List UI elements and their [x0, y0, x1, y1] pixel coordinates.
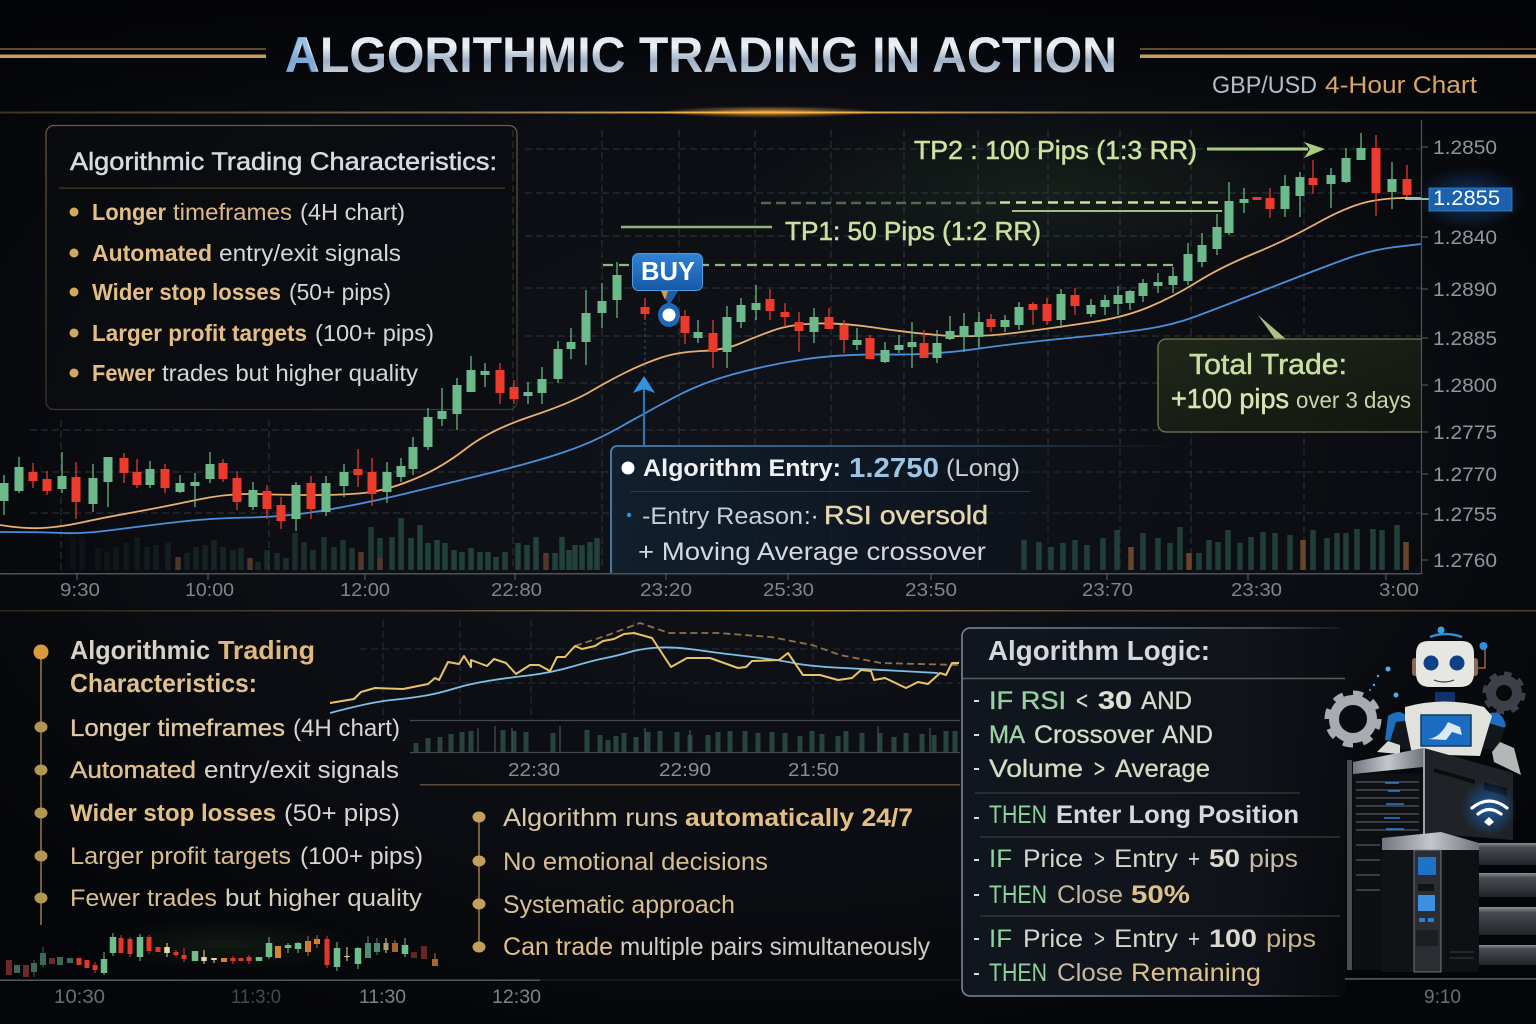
entry reason — [627, 500, 988, 566]
mini chart time labels: 21:50 — [788, 760, 839, 780]
logic: entry conditions: Volume — [989, 755, 1083, 783]
front server — [1382, 832, 1479, 972]
bullet: longer timeframes: timeframes — [173, 199, 292, 225]
list item: systematic: Systematic approach — [503, 891, 735, 919]
logic: second target: Price — [1023, 925, 1083, 953]
logic: second target: Remaining — [1131, 959, 1261, 987]
price axis: 1.2770 — [1433, 465, 1497, 486]
timeline item: larger targets — [34, 843, 423, 870]
bullet: longer timeframes — [70, 199, 405, 225]
logic: first target: > — [1094, 845, 1105, 873]
list item: runs automatically: automatically 24/7 — [685, 804, 913, 832]
timeline item: wider stops — [34, 800, 400, 827]
BUY marker: BUY — [641, 256, 695, 286]
timeline item: wider stops: Wider stop losses — [70, 800, 276, 827]
bullet: larger targets: (100+ pips) — [315, 320, 434, 346]
bottom axis: 9:10 — [1424, 987, 1461, 1008]
callout: algorithm entry box — [611, 446, 1180, 573]
timeline item: automated: entry/exit signals — [204, 757, 399, 784]
section divider — [0, 610, 1536, 612]
list item: multiple pairs — [472, 933, 930, 961]
mini chart time labels: 22:90 — [659, 760, 711, 780]
wifi icon — [1461, 780, 1517, 836]
logic: enter position: THEN — [989, 801, 1047, 829]
time axis: 22:80 — [491, 580, 542, 600]
moving average: blue — [0, 244, 1421, 533]
mini chart: dashed tan line — [575, 623, 959, 665]
bullet: larger targets: Larger profit targets — [92, 320, 307, 346]
logic: entry conditions: Crossover — [1034, 721, 1154, 749]
time axis: 3:00 — [1379, 580, 1419, 600]
logic: entry conditions: < — [1076, 687, 1088, 715]
header divider — [0, 106, 1536, 118]
time axis — [0, 573, 1421, 600]
timeline item: longer timeframes: Longer timeframes — [70, 715, 285, 742]
callout: total trade: Total Trade: — [1189, 349, 1347, 381]
timeline heading: Algorithmic — [70, 635, 210, 665]
mini chart: volume — [410, 720, 960, 752]
mini chart time labels: 22:30 — [508, 760, 560, 780]
current price tag: 1.2855 — [1433, 187, 1500, 210]
bullet: fewer trades: Fewer — [92, 360, 155, 386]
logic: entry conditions: 30 — [1098, 687, 1132, 715]
robot arms and shoulders — [1377, 712, 1521, 775]
bottom axis: 11:30 — [359, 987, 406, 1008]
price axis: 1.2890 — [1433, 280, 1497, 301]
time axis: 25:30 — [763, 580, 814, 600]
entry reason: RSI oversold — [824, 500, 988, 530]
timeline item: larger targets: (100+ pips) — [300, 843, 423, 870]
logic: first target: Close — [1057, 881, 1123, 909]
current price tag — [1405, 166, 1525, 230]
bottom axis — [0, 980, 1461, 1008]
TP1 label: TP1: 50 Pips (1:2 RR) — [785, 216, 1041, 246]
logic heading: Algorithm Logic: — [988, 635, 1210, 666]
timeline item: wider stops: (50+ pips) — [284, 800, 400, 827]
time axis: 10:00 — [185, 580, 234, 600]
subtitle: GBP/USD — [1212, 72, 1317, 99]
time axis: 23:70 — [1082, 580, 1133, 600]
entry price line: (Long) — [946, 455, 1020, 482]
bottom axis: 11:3:0 — [231, 987, 281, 1008]
callout: total trade — [1158, 315, 1421, 432]
callout: total trade: +100 pips — [1171, 383, 1289, 414]
time axis: 12:00 — [340, 580, 390, 600]
moving average: orange — [0, 198, 1421, 528]
logic: second target: + — [1188, 925, 1200, 953]
timeline item: fewer trades: but higher quality — [225, 885, 422, 912]
logic: entry conditions: Average — [1115, 755, 1210, 783]
price axis: 1.2800 — [1433, 376, 1497, 397]
icon: sparkles — [1369, 666, 1398, 698]
logic: first target — [989, 845, 1298, 909]
bullet: longer timeframes: Longer — [92, 199, 166, 225]
logic: second target: IF — [989, 925, 1012, 953]
entry reason: + Moving Average crossover — [638, 538, 986, 566]
list item: multiple pairs: Can trade — [503, 933, 613, 961]
bottom-middle timeline list — [472, 804, 930, 961]
price axis: 1.2755 — [1433, 505, 1497, 526]
logic: entry conditions: IF RSI — [989, 687, 1066, 715]
bullet: larger targets — [70, 320, 434, 346]
price axis: 1.2840 — [1433, 228, 1497, 249]
logic: enter position: Enter Long Position — [1056, 801, 1299, 829]
timeline heading: Characteristics: — [70, 668, 257, 698]
logic: first target: THEN — [989, 881, 1047, 909]
subtitle — [1212, 72, 1477, 99]
list item: runs automatically: Algorithm runs — [503, 804, 678, 832]
bottom axis: 12:30 — [492, 987, 541, 1008]
logic: entry conditions — [989, 687, 1213, 783]
base line — [1345, 978, 1536, 980]
TP2 label with arrow: TP2 : 100 Pips (1:3 RR) — [914, 135, 1197, 165]
main chart grid — [30, 130, 1421, 570]
list item: runs automatically — [472, 804, 913, 832]
panel heading: Algorithmic Trading Characteristics: — [70, 148, 497, 176]
timeline heading: Trading — [218, 635, 315, 665]
title: A — [285, 27, 318, 83]
logic: first target: Entry — [1114, 845, 1179, 873]
time axis: 9:30 — [60, 580, 100, 600]
timeline item: larger targets: Larger profit targets — [70, 843, 291, 870]
entry arrow — [633, 322, 655, 446]
logic: second target: 100 — [1209, 925, 1257, 953]
robot torso with screen — [1405, 702, 1492, 756]
illustration: robot on servers — [1328, 626, 1536, 980]
title — [0, 27, 1536, 83]
mini chart — [330, 620, 960, 786]
entry reason: -Entry Reason — [642, 503, 803, 530]
list item: no emotion: No emotional decisions — [503, 848, 768, 876]
TP2 label with arrow — [914, 135, 1325, 165]
mini chart: yellow line — [330, 633, 959, 703]
entry price line — [622, 452, 1020, 483]
price axis: 1.2775 — [1433, 423, 1497, 444]
timeline item: longer timeframes: (4H chart) — [293, 715, 400, 742]
logic: first target: IF — [989, 845, 1012, 873]
logic: first target: + — [1188, 845, 1200, 873]
entry price line: Algorithm Entry: — [643, 455, 841, 482]
panel: top characteristics — [46, 126, 517, 410]
logic: second target: THEN — [989, 959, 1047, 987]
price axis: 1.2850 — [1433, 138, 1497, 159]
bullet: automated: Automated — [92, 240, 212, 266]
candlesticks — [4, 133, 1407, 531]
bullet: wider stops: (50+ pips) — [289, 279, 391, 305]
BUY marker — [632, 254, 702, 327]
bullet: automated — [70, 240, 401, 266]
volume bars — [73, 518, 1406, 570]
bottom candlestick strip — [9, 933, 435, 977]
mini chart: blue line — [330, 647, 938, 713]
time axis: 23:30 — [1231, 580, 1282, 600]
timeline item: automated: Automated — [70, 757, 196, 784]
timeline item: fewer trades — [34, 885, 422, 912]
logic: second target: > — [1094, 925, 1105, 953]
title: ALGORITHMIC TRADING IN ACTION — [285, 27, 1117, 83]
logic: second target: Entry — [1114, 925, 1179, 953]
robot head — [1412, 626, 1488, 702]
timeline item: automated — [34, 757, 399, 784]
main server — [1347, 748, 1513, 970]
bullet: wider stops — [70, 279, 391, 305]
logic: entry conditions: MA — [989, 721, 1025, 749]
logic: second target: Close — [1057, 959, 1123, 987]
logic: second target — [989, 925, 1316, 987]
timeline heading — [34, 635, 315, 698]
icon: dark gear — [1485, 674, 1523, 712]
entry reason: :· — [804, 503, 819, 530]
logic: first target: 50 — [1209, 845, 1240, 873]
logic: first target: pips — [1249, 845, 1298, 873]
logic: first target: 50% — [1131, 881, 1190, 909]
list item: multiple pairs: multiple pairs simultaneously — [620, 933, 930, 961]
logic: entry conditions: > — [1094, 755, 1105, 783]
timeline item: fewer trades: Fewer trades — [70, 885, 217, 912]
time axis: 23:50 — [905, 580, 957, 600]
bullet: automated: entry/exit signals — [219, 240, 401, 266]
price axis: 1.2885 — [1433, 329, 1497, 350]
storage disks — [1479, 843, 1536, 965]
icon: light gear — [1328, 694, 1378, 744]
logic: entry conditions: AND — [1162, 721, 1213, 749]
callout: total trade: over 3 days — [1296, 387, 1411, 413]
bottom-left timeline list — [34, 635, 423, 925]
bullet: wider stops: Wider stop losses — [92, 279, 281, 305]
subtitle: 4-Hour Chart — [1325, 72, 1477, 99]
bullet: fewer trades: trades but higher quality — [162, 360, 419, 386]
bottom axis: 10:30 — [54, 987, 105, 1008]
logic: second target: pips — [1266, 925, 1316, 953]
panel: algorithm logic — [962, 628, 1345, 996]
timeline item: longer timeframes — [34, 715, 400, 742]
logic: entry conditions: AND — [1141, 687, 1192, 715]
time axis: 23:20 — [640, 580, 692, 600]
logic: first target: Price — [1023, 845, 1083, 873]
mini chart time labels — [508, 760, 839, 780]
take-profit levels — [603, 202, 1222, 265]
bullet: longer timeframes: (4H chart) — [300, 199, 405, 225]
price axis: 1.2760 — [1433, 551, 1497, 572]
entry price line: 1.2750 — [849, 452, 939, 483]
price axis — [1421, 120, 1497, 574]
